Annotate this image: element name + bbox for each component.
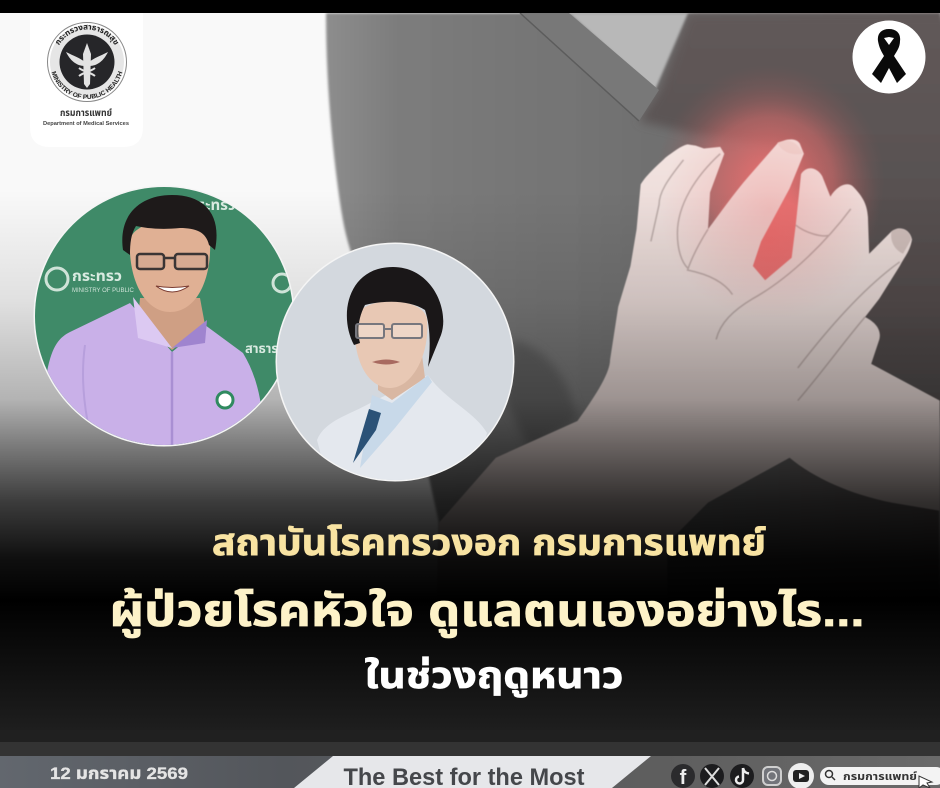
dark shirt area right of collar xyxy=(639,13,940,420)
smile xyxy=(156,286,189,292)
mouth xyxy=(372,360,400,364)
placket xyxy=(171,352,173,447)
lilac shirt xyxy=(47,303,262,450)
ministry seal xyxy=(47,22,127,102)
ministry seal: กระทรวงสาธารณสุข xyxy=(56,24,118,46)
glasses xyxy=(137,254,207,269)
hair xyxy=(347,267,443,367)
neck xyxy=(378,355,425,400)
search pill: กรมการแพทย์ xyxy=(843,771,917,783)
mourning ribbon badge xyxy=(852,20,926,94)
icon: black ribbon xyxy=(872,29,906,83)
shirt collar xyxy=(520,13,659,121)
fade to black xyxy=(0,190,940,600)
portrait: doctor in white coat xyxy=(270,240,520,490)
footer date: 12 มกราคม 2569 xyxy=(50,764,188,783)
icon: YouTube xyxy=(788,763,814,788)
fingernails xyxy=(777,141,803,154)
neck skin xyxy=(569,13,688,90)
face xyxy=(130,221,210,312)
logo card: Department of Medical Services xyxy=(43,121,129,127)
icon: cursor xyxy=(919,776,932,788)
sleeve shadow xyxy=(505,340,578,450)
portrait: man in lilac shirt: กระทรวง xyxy=(188,197,244,214)
hair xyxy=(122,195,217,255)
heading: main question: ผู้ป่วยโรคหัวใจ ดูแลตนเองอย่างไร... xyxy=(110,587,864,638)
sleeve shading xyxy=(82,345,88,420)
collar xyxy=(133,297,172,348)
portrait: man in lilac shirt xyxy=(30,180,300,450)
icon: TikTok xyxy=(730,764,754,788)
footer bar xyxy=(0,730,940,788)
icon: Instagram xyxy=(763,767,781,785)
logo card xyxy=(43,22,129,127)
torso in shirt xyxy=(326,13,940,600)
icon: X xyxy=(700,764,724,788)
portrait: man in lilac shirt: กระทรว xyxy=(72,268,122,285)
portrait: man in lilac shirt: สาธารณ xyxy=(245,341,290,356)
social icons xyxy=(671,763,940,788)
shirt collar xyxy=(360,375,432,468)
pocket badge xyxy=(217,392,233,408)
finger creases xyxy=(651,154,900,401)
red pain glow xyxy=(640,60,900,300)
icon: facebook xyxy=(671,764,695,788)
portrait: man in lilac shirt: MINISTRY OF PUBLIC xyxy=(72,288,134,294)
department name: กรมการแพทย์ xyxy=(60,108,112,119)
backdrop logos xyxy=(46,268,68,290)
red tint over fingers xyxy=(660,100,880,320)
slogan banner xyxy=(294,756,651,788)
tie xyxy=(353,409,381,463)
title text block xyxy=(110,522,864,697)
heading: institute name: สถาบันโรคทรวงอก กรมการแพทย์ xyxy=(212,522,766,563)
neck xyxy=(138,298,205,350)
search pill xyxy=(820,767,940,788)
ministry seal: MINISTRY OF PUBLIC HEALTH xyxy=(52,71,122,99)
hand and arm xyxy=(435,139,940,653)
face xyxy=(355,301,427,388)
glasses xyxy=(356,324,422,338)
white coat xyxy=(317,375,487,490)
top black band xyxy=(0,0,940,13)
heading: winter season: ในช่วงฤดูหนาว xyxy=(364,655,624,697)
